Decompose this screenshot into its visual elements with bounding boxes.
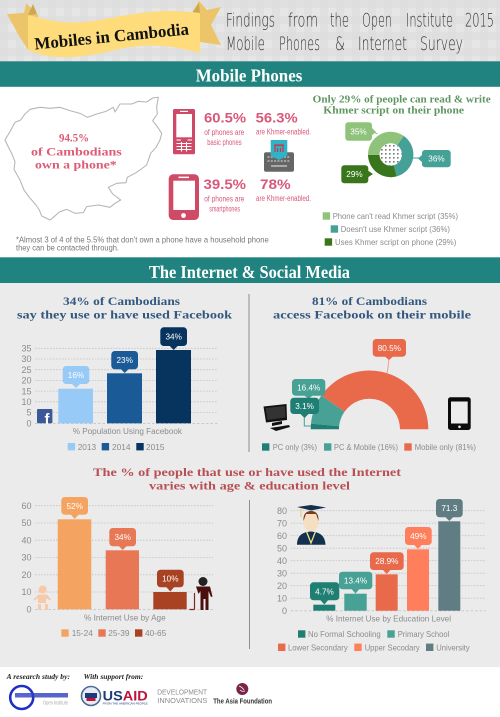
panel: phone ownership map <box>5 97 162 220</box>
bar chart: Facebook use: 25 <box>21 365 32 375</box>
heading: 34% use Facebook <box>17 296 233 322</box>
logo: Development Innovations <box>157 689 208 705</box>
callout: 34% <box>160 327 187 350</box>
stat: 78% Khmer-enabled: are Khmer-enabled. <box>256 194 311 203</box>
callout: 23%: 23% <box>117 356 133 365</box>
bar chart: Facebook use: 20 <box>21 376 32 386</box>
icon: Facebook: f <box>44 411 50 428</box>
bar chart: age: 50 <box>21 518 32 528</box>
survey title: Findings <box>226 10 275 32</box>
logo: Development Innovations: INNOVATIONS <box>157 698 208 705</box>
grey background panel <box>0 283 500 667</box>
stat: 60.5% basic phones: 60.5% <box>204 109 247 125</box>
legend: Facebook years: 2013 <box>78 442 97 452</box>
stat: 60.5% basic phones: basic phones <box>207 138 242 147</box>
legend: Facebook years: 2014 <box>112 442 131 452</box>
survey title: & <box>335 33 345 55</box>
logo: The Asia Foundation <box>213 683 272 706</box>
bar chart: age: 60 <box>21 501 32 511</box>
callout: 4.7%: 4.7% <box>315 588 334 596</box>
map of Cambodia <box>5 97 162 220</box>
bar chart: education: 60 <box>277 531 287 541</box>
logo: USAID: USAID <box>103 687 148 703</box>
legend: devices: PC only (3%) <box>273 442 317 452</box>
bar chart: Facebook use: 30 <box>21 354 32 364</box>
bar chart: education: 30 <box>277 568 287 578</box>
callout: 35% <box>345 122 378 141</box>
logo: Open Institute <box>10 686 68 709</box>
text: with support from: With support from: <box>84 672 143 681</box>
stat: 39.5% smartphones: smartphones <box>209 205 240 214</box>
callout: 49%: 49% <box>410 532 426 541</box>
callout: 13.4% <box>339 572 372 594</box>
heading: Khmer script: Khmer script on their phone <box>323 105 464 116</box>
bar chart: education <box>277 499 486 624</box>
callout: 34%: 34% <box>115 533 131 542</box>
icon: graduate <box>297 505 326 545</box>
heading: Khmer script <box>313 95 491 116</box>
icon: desktop computer <box>264 404 290 431</box>
text: 94.5% own a phone <box>31 131 122 172</box>
legend: education levels: No Formal Schooling <box>308 629 381 639</box>
callout: 28.9%: 28.9% <box>375 557 398 566</box>
section band: Mobile Phones: Mobile Phones <box>196 66 302 86</box>
heading: 81% on mobile: 81% of Cambodians <box>312 296 428 308</box>
stat: 39.5% smartphones: of phones are <box>204 194 245 204</box>
callout: 10% <box>157 570 184 592</box>
bar chart: Facebook use: 5 <box>26 408 32 418</box>
icon: Khmer keyboard <box>264 140 294 172</box>
heading: internet use by age and education <box>93 467 401 492</box>
bar chart: education: 20 <box>277 581 287 591</box>
stat: 78% Khmer-enabled <box>256 176 311 203</box>
heading: Khmer script: Only 29% of people can read & write <box>313 95 491 106</box>
banner: Mobiles in Cambodia: Mobiles in Cambodia <box>34 19 190 53</box>
callout: 36%: 36% <box>428 155 445 164</box>
survey title: Survey <box>420 33 463 55</box>
panel: Khmer script <box>313 95 491 247</box>
semicircle chart: device use <box>290 339 428 429</box>
bar chart: education: 10 <box>277 593 287 603</box>
callout: 71.3 <box>436 499 463 521</box>
survey title: from <box>288 10 318 32</box>
survey title: Open <box>362 10 392 32</box>
bar chart: education: 40 <box>277 556 287 566</box>
bar chart: age: % Internet Use by Age <box>84 612 166 622</box>
stat: 39.5% smartphones: 39.5% <box>204 176 247 192</box>
legend: Facebook years: 2015 <box>146 442 165 452</box>
icon: basic phone <box>173 109 195 154</box>
callout: 4.7% <box>310 582 339 604</box>
legend: Khmer script: Phone can't read Khmer script (35%) <box>333 211 458 221</box>
callout: 13.4%: 13.4% <box>344 576 367 586</box>
stat: 56.3% Khmer-enabled <box>256 109 311 136</box>
bar chart: age <box>21 497 213 622</box>
heading: 81% on mobile: access Facebook on their mobile <box>273 310 471 322</box>
text: 94.5% own a phone: of Cambodians <box>31 145 122 159</box>
legend: age groups <box>61 628 167 638</box>
survey title: Phones <box>279 33 320 55</box>
panel: internet use by age <box>21 497 213 638</box>
legend: devices <box>262 442 476 452</box>
callout: 49% <box>405 527 432 549</box>
legend: education levels: Upper Secodary <box>365 642 420 652</box>
survey title <box>226 10 494 55</box>
header <box>0 0 500 62</box>
legend: age groups: 25-39 <box>108 628 130 638</box>
legend: devices: Mobile only (81%) <box>415 442 476 452</box>
callout: 71.3: 71.3 <box>441 504 458 513</box>
footnote: *Almost 3 of 4 of the 5.5% that don't own a phone have a household phone <box>16 235 269 244</box>
legend: age groups: 40-65 <box>145 628 167 638</box>
banner: Mobiles in Cambodia <box>7 1 221 57</box>
heading: 34% use Facebook: 34% of Cambodians <box>63 296 181 308</box>
heading: internet use by age and education: The % of people that use or have used the Internet <box>93 467 401 479</box>
callout: 34% <box>109 528 136 550</box>
stat: 60.5% basic phones <box>204 109 247 147</box>
logo: Development Innovations: DEVELOPMENT <box>157 689 208 696</box>
text: 94.5% own a phone: own a phone* <box>35 158 117 172</box>
callout: 16.4%: 16.4% <box>297 384 320 392</box>
bar chart: Facebook use <box>21 327 218 436</box>
section band: The Internet & Social Media: The Internet & Social Media <box>149 262 350 282</box>
icon: baby <box>34 586 51 610</box>
stat: 78% Khmer-enabled: 78% <box>260 176 291 192</box>
bar chart: education: % Internet Use by Education Level <box>326 614 451 624</box>
logo: The Asia Foundation: The Asia Foundation <box>213 699 272 706</box>
callout: 16%: 16% <box>68 371 84 380</box>
legend: Khmer script: Doesn't use Khmer script (36%) <box>341 224 450 234</box>
logo: USAID: FROM THE AMERICAN PEOPLE <box>103 702 148 706</box>
footnote <box>16 235 269 252</box>
bar chart: education: 50 <box>277 543 287 553</box>
footnote: they can be contacted through. <box>16 244 119 252</box>
icon: smartphone <box>169 174 199 220</box>
callout: 52% <box>61 497 88 519</box>
survey title: Mobile <box>226 33 265 55</box>
callout: 23% <box>111 351 138 373</box>
panel: internet use by education <box>277 499 486 652</box>
text: 94.5% own a phone: 94.5% <box>59 131 89 145</box>
legend: Khmer script: Uses Khmer script on phone (29%) <box>335 237 457 247</box>
bar chart: Facebook use: % Population Using Facebook <box>73 426 183 436</box>
icon: old man <box>190 577 212 610</box>
text: research study by: A research study by: <box>6 672 70 681</box>
icon: tablet <box>448 397 471 430</box>
legend: education levels: Primary School <box>398 629 449 639</box>
panel: Facebook use <box>17 296 233 452</box>
callout: 29% <box>341 165 373 183</box>
bar chart: Facebook use: 35 <box>21 344 32 354</box>
heading: 34% use Facebook: say they use or have used Facebook <box>17 310 233 322</box>
bar chart: age: 10 <box>21 587 32 597</box>
stat: 39.5% smartphones <box>204 176 247 214</box>
legend: Facebook years <box>68 442 165 452</box>
callout: 29%: 29% <box>346 170 363 179</box>
bar chart: age: 30 <box>21 553 32 563</box>
heading: 81% on mobile <box>273 296 471 322</box>
legend: education levels <box>278 629 470 652</box>
icon: Facebook <box>37 409 52 428</box>
bar chart: education: 0 <box>282 606 287 616</box>
bar chart: education: 80 <box>277 506 287 516</box>
legend: education levels: University <box>436 642 470 652</box>
heading: internet use by age and education: varies with age & education level <box>149 480 350 492</box>
bar chart: Facebook use: 0 <box>26 418 32 428</box>
callout: 52%: 52% <box>67 502 83 511</box>
stat: 60.5% basic phones: of phones are <box>204 128 245 137</box>
panel: Facebook on mobile <box>262 296 476 452</box>
callout: 10%: 10% <box>162 574 178 584</box>
callout: 34%: 34% <box>166 332 182 342</box>
callout: 28.9% <box>370 552 404 574</box>
survey title: Internet <box>358 33 407 55</box>
bar chart: age: 0 <box>26 604 32 614</box>
legend: Khmer script <box>323 211 458 247</box>
bar chart: age: 20 <box>21 570 32 580</box>
legend: devices: PC & Mobile (16%) <box>334 442 398 452</box>
survey title: Institute <box>406 10 453 32</box>
survey title: the <box>330 10 349 32</box>
callout: 3.1%: 3.1% <box>295 402 314 411</box>
footer: credits <box>6 672 272 709</box>
logo: Open Institute: Open Institute <box>43 700 68 706</box>
callout: 16% <box>63 366 89 388</box>
logo: USAID <box>82 686 148 706</box>
bar chart: Facebook use: 15 <box>21 386 32 396</box>
stat: 56.3% Khmer-enabled: are Khmer-enabled. <box>256 128 311 136</box>
section band: The Internet & Social Media <box>0 257 500 283</box>
section band: Mobile Phones <box>0 61 500 87</box>
donut chart: Khmer script <box>368 132 413 177</box>
legend: education levels: Lower Secondary <box>288 642 348 652</box>
bar chart: education: 70 <box>277 518 287 528</box>
callout: 36% <box>413 150 451 167</box>
callout: 80.5%: 80.5% <box>378 344 401 353</box>
bar chart: age: 40 <box>21 535 32 545</box>
stat: 56.3% Khmer-enabled: 56.3% <box>256 109 298 125</box>
legend: age groups: 15-24 <box>72 628 93 638</box>
bar chart: Facebook use: 10 <box>21 397 32 407</box>
callout: 35%: 35% <box>350 128 367 136</box>
